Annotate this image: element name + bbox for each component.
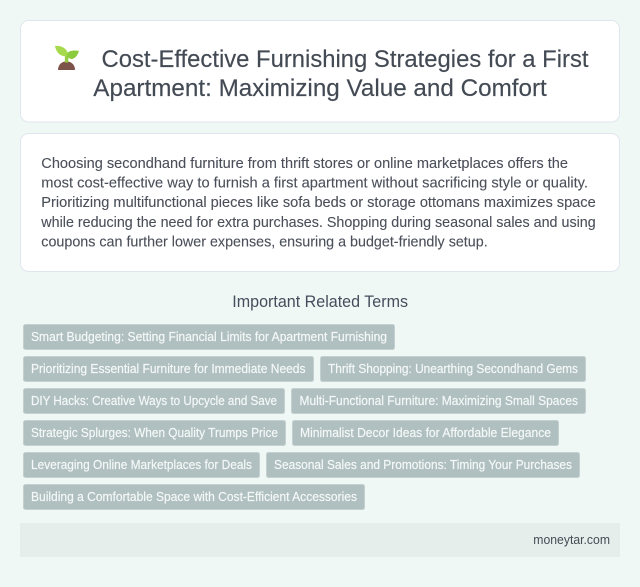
title: Apartment: Maximizing Value and Comfort: [93, 75, 547, 102]
tag: DIY hacks: [24, 388, 284, 414]
text block: summary: most cost-effective way to furnish a first apartment without sacrificing style or quality.: [41, 176, 588, 192]
tag: smart budgeting: Smart Budgeting: Setting Financial Limits for Apartment Furnishing: [31, 330, 387, 344]
panel: header: [20, 20, 620, 122]
tag: minimalist decor: Minimalist Decor Ideas for Affordable Elegance: [300, 426, 551, 440]
text block: summary: Prioritizing multifunctional pieces like sofa beds or storage ottomans maximizes space: [41, 195, 596, 211]
tag: seasonal sales: Seasonal Sales and Promotions: Timing Your Purchases: [274, 458, 572, 472]
icon: sprout: [55, 46, 79, 70]
tag: thrift shopping: [320, 356, 586, 382]
tag: smart budgeting: [24, 324, 394, 350]
tag list: [24, 324, 586, 510]
footer: site name: moneytar.com: [533, 533, 610, 547]
panel: summary paragraph: [20, 134, 620, 272]
tag: DIY hacks: DIY Hacks: Creative Ways to Upcycle and Save: [31, 394, 277, 408]
tag: seasonal sales: [266, 452, 580, 478]
tag: strategic splurges: Strategic Splurges: When Quality Trumps Price: [31, 426, 278, 440]
heading: related terms: Important Related Terms: [232, 293, 408, 311]
tag: cost-efficient accessories: [24, 484, 364, 510]
title: Cost-Effective Furnishing Strategies for a First: [102, 46, 589, 73]
title: [93, 46, 589, 102]
tag: online marketplaces: Leveraging Online Marketplaces for Deals: [31, 458, 252, 472]
tag: minimalist decor: [292, 420, 558, 446]
text block: summary: Choosing secondhand furniture from thrift stores or online marketplaces offers the: [41, 156, 568, 172]
tag: online marketplaces: [24, 452, 260, 478]
tag: essential furniture: Prioritizing Essential Furniture for Immediate Needs: [31, 362, 306, 376]
tag: strategic splurges: [24, 420, 286, 446]
text block: summary: coupons can further lower expenses, ensuring a budget-friendly setup.: [41, 234, 488, 250]
tag: thrift shopping: Thrift Shopping: Unearthing Secondhand Gems: [328, 362, 578, 376]
tag: cost-efficient accessories: Building a Comfortable Space with Cost-Efficient Accessories: [31, 490, 357, 504]
text block: summary: [40, 156, 596, 250]
tag: multi-functional furniture: Multi-Functional Furniture: Maximizing Small Spaces: [300, 394, 578, 408]
tag: multi-functional furniture: [292, 388, 586, 414]
footer: [20, 523, 620, 557]
tag: essential furniture: [24, 356, 314, 382]
text block: summary: while reducing the need for extra purchases. Shopping during seasonal sales and using: [40, 215, 596, 231]
